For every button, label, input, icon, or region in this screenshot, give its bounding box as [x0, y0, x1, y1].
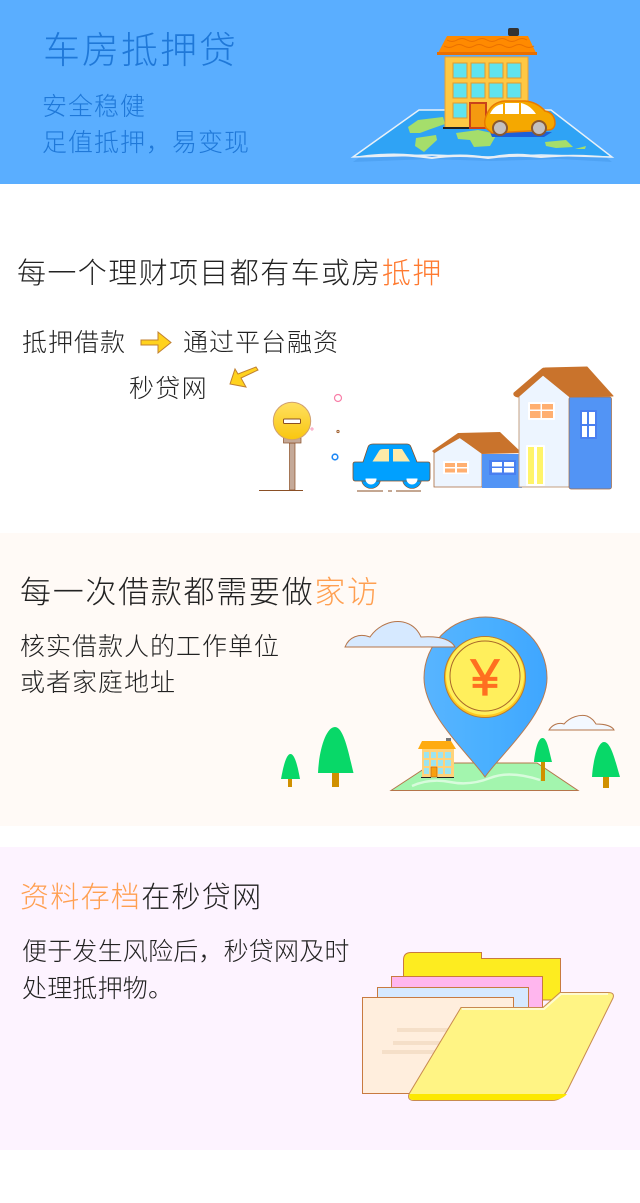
icon: blue car	[353, 444, 430, 491]
icon: tree 4	[592, 742, 620, 788]
icon: coin: ¥	[470, 649, 500, 707]
section 1 heading: 每一个理财项目都有车或房抵押	[17, 258, 443, 290]
illustration: folder with documents	[362, 952, 614, 1101]
icon: tree 2	[318, 727, 354, 787]
panel: header banner	[0, 0, 640, 184]
icon: folder front	[409, 992, 613, 1100]
icon: ground	[391, 763, 578, 790]
icon: left cloud	[345, 622, 455, 647]
icon: right arrow	[140, 331, 172, 354]
icon: coin	[444, 636, 526, 718]
text: platform financing: 通过平台融资	[183, 329, 339, 357]
text: mortgage borrowing: 抵押借款	[22, 329, 126, 357]
header subtitle	[42, 92, 250, 156]
illustration: sign, car and houses	[259, 366, 614, 492]
icon: world map	[353, 110, 612, 162]
section 2 body text: 或者家庭地址	[20, 669, 176, 697]
illustration: building and car on a map	[350, 28, 614, 162]
panel: home visit	[0, 533, 640, 826]
icon: peach document	[362, 998, 514, 1094]
section 3 body text: 便于发生风险后，秒贷网及时	[22, 938, 350, 966]
icon: small building	[418, 738, 456, 778]
icon: right cloud	[549, 715, 614, 730]
section 3 body text	[22, 938, 350, 1003]
section 3 body text: 处理抵押物。	[22, 975, 173, 1003]
text: miaodai platform: 秒贷网	[129, 375, 208, 403]
section 2 body text: 核实借款人的工作单位	[20, 633, 280, 661]
panel: document archive	[0, 847, 640, 1150]
illustration: location pin with coin	[281, 616, 620, 791]
section 3 heading: 资料存档在秒贷网	[20, 882, 262, 914]
icon: tree 3	[534, 738, 552, 781]
header subtitle: 安全稳健	[42, 92, 146, 120]
icon: large house	[514, 367, 613, 489]
icon: pink sheet	[392, 976, 542, 1026]
decorative bubbles	[311, 394, 342, 460]
icon: folder back	[404, 952, 560, 1000]
icon: orange car	[485, 101, 555, 137]
icon: blue sheet	[378, 988, 528, 1038]
icon: map pin	[424, 617, 547, 777]
section 2 body text	[20, 633, 280, 697]
header subtitle: 足值抵押，易变现	[42, 128, 250, 156]
icon: road sign	[259, 402, 311, 490]
icon: tree 1	[281, 754, 300, 787]
icon: small house	[432, 432, 522, 488]
header title: 车房抵押贷	[43, 30, 238, 71]
section 2 heading: 每一次借款都需要做家访	[20, 575, 380, 610]
icon: building	[437, 36, 537, 129]
icon: chimney	[508, 28, 519, 36]
icon: diagonal arrow	[229, 366, 259, 388]
